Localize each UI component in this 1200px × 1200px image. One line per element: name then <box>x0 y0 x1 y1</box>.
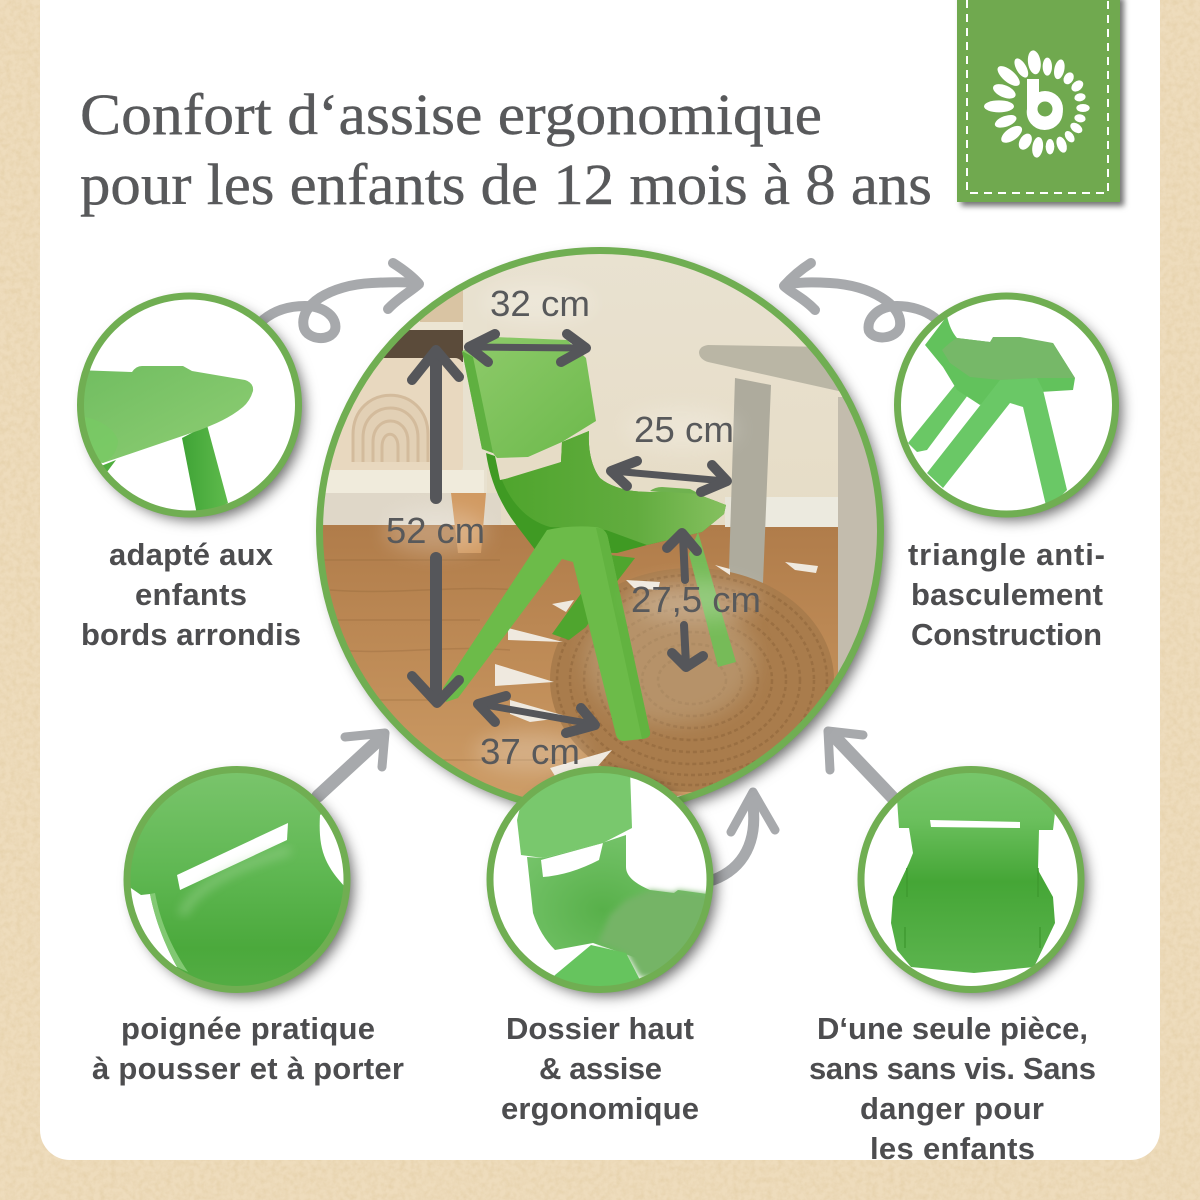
label: handle <box>92 1011 404 1086</box>
photo: table <box>699 345 880 700</box>
title: pour les enfants de 12 mois à 8 ans <box>80 152 932 217</box>
front A-frame <box>443 526 650 741</box>
circle: anti-tip triangle detail <box>898 296 1116 514</box>
dimension: 37 cm <box>478 696 595 772</box>
label: rounded edges: bords arrondis <box>81 617 301 652</box>
seat and backrest body <box>486 431 726 553</box>
photo: shelf with basket <box>326 290 486 553</box>
dimension: 32 cm: 32 cm <box>490 283 590 324</box>
photo: wall and floor <box>323 254 842 797</box>
dimension: 27,5 cm <box>631 533 761 667</box>
label: one piece: les enfants <box>870 1131 1035 1166</box>
circle: carrying handle detail <box>115 766 360 994</box>
arrow: bottom right to main circle <box>828 731 893 798</box>
dimension: 32 cm <box>469 283 590 362</box>
photo: green chair <box>443 337 736 741</box>
arrow: bottom left to main circle <box>318 733 385 796</box>
arrow: top right to main circle <box>784 263 935 337</box>
dimension: 52 cm <box>386 350 485 703</box>
label: anti-tip triangle: basculement <box>911 577 1103 612</box>
title: Confort d‘assise ergonomique <box>80 82 822 147</box>
dimension: 52 cm: 52 cm <box>386 510 485 551</box>
photo: tassels <box>495 562 818 810</box>
label: backrest: ergonomique <box>501 1091 699 1126</box>
photo: jute rug <box>550 568 834 792</box>
wall seen through back gap <box>497 443 562 480</box>
label: anti-tip triangle <box>908 537 1105 652</box>
hazes behind labels <box>384 283 761 772</box>
label: rounded edges: enfants <box>135 577 247 612</box>
circle: high backrest detail <box>490 770 715 1000</box>
title <box>80 82 932 217</box>
label: handle: poignée pratique <box>121 1011 375 1046</box>
label: handle: à pousser et à porter <box>92 1051 404 1086</box>
dimension: 27,5 cm: 27,5 cm <box>631 579 761 620</box>
label: backrest: & assise <box>539 1051 662 1086</box>
dimension: 25 cm: 25 cm <box>634 409 734 450</box>
label: anti-tip triangle: Construction <box>911 617 1102 652</box>
rear legs <box>552 555 635 640</box>
circle: one-piece construction detail <box>861 770 1081 990</box>
icon: brand flower logo <box>984 50 1090 158</box>
arrow: top left to main circle <box>263 263 419 338</box>
label: one piece <box>809 1011 1096 1166</box>
circle: rounded seat edge detail <box>75 296 298 520</box>
label: backrest <box>501 1011 699 1126</box>
dimension: 37 cm: 37 cm <box>480 731 580 772</box>
arrow: bottom centre to main circle <box>713 792 775 880</box>
label: one piece: D‘une seule pièce, <box>817 1011 1088 1046</box>
backrest <box>462 337 596 458</box>
label: rounded edges: adapté aux <box>109 537 274 572</box>
label: rounded edges <box>81 537 301 652</box>
label: backrest: Dossier haut <box>506 1011 694 1046</box>
dimension: 25 cm <box>611 409 734 492</box>
logo tag <box>957 0 1120 202</box>
label: one piece: danger pour <box>860 1091 1044 1126</box>
panel: main chair photo with dimensions <box>310 240 890 825</box>
label: one piece: sans sans vis. Sans <box>809 1051 1096 1086</box>
label: anti-tip triangle: triangle anti- <box>908 537 1105 572</box>
